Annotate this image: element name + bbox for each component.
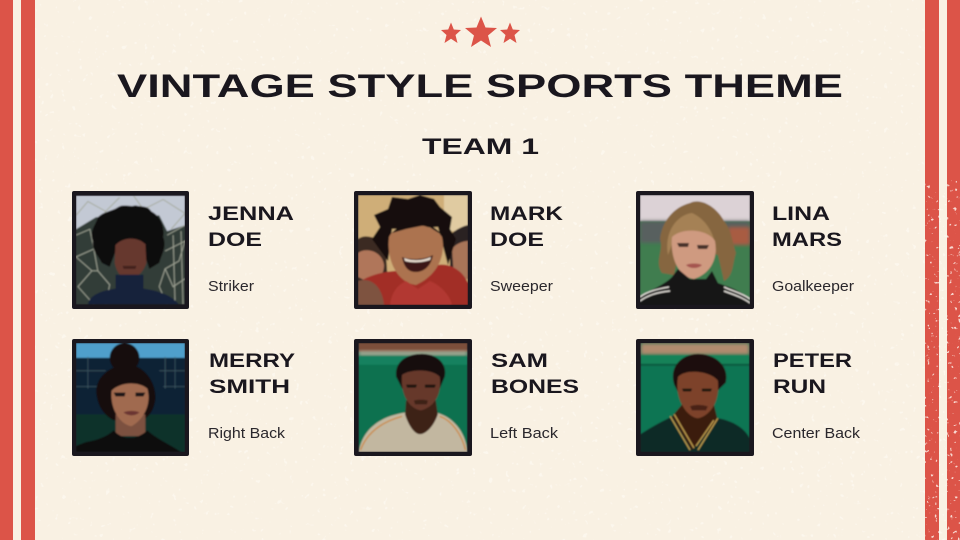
name: JENNA (208, 204, 294, 225)
role: Center Back (772, 425, 861, 442)
role: Left Back (490, 425, 559, 442)
player card: Peter Run: RUN (773, 377, 826, 398)
player card: Lina Mars (636, 191, 854, 309)
photo: Jenna Doe (72, 191, 189, 309)
name: SAM (491, 351, 548, 372)
player card: Jenna Doe (72, 191, 294, 309)
player card: Jenna Doe: DOE (208, 230, 262, 251)
player card: Merry Smith: SMITH (209, 377, 290, 398)
title: VINTAGE STYLE SPORTS THEME (117, 68, 843, 104)
name: LINA (772, 204, 830, 225)
role: Goalkeeper (772, 278, 854, 295)
player card: Peter Run (636, 339, 861, 456)
player card: Lina Mars: MARS (772, 230, 842, 251)
name: MARK (490, 204, 563, 225)
player card: Merry Smith (72, 339, 295, 456)
role: Right Back (208, 425, 286, 442)
player card: Sam Bones: BONES (491, 377, 579, 398)
subtitle: TEAM 1 (422, 134, 539, 159)
name: PETER (773, 351, 852, 372)
right stripes (925, 0, 960, 540)
photo: Peter Run (636, 339, 754, 456)
role: Sweeper (490, 278, 553, 295)
photo: Sam Bones (354, 339, 472, 456)
player card: Sam Bones (354, 339, 579, 456)
left stripes (0, 0, 35, 540)
icon: three stars (441, 16, 520, 47)
player card: Mark Doe (354, 191, 563, 309)
photo: Mark Doe (354, 191, 472, 309)
name: MERRY (209, 351, 295, 372)
photo: Lina Mars (636, 191, 754, 309)
player card: Mark Doe: DOE (490, 230, 544, 251)
role: Striker (208, 278, 254, 295)
photo: Merry Smith (72, 339, 189, 456)
